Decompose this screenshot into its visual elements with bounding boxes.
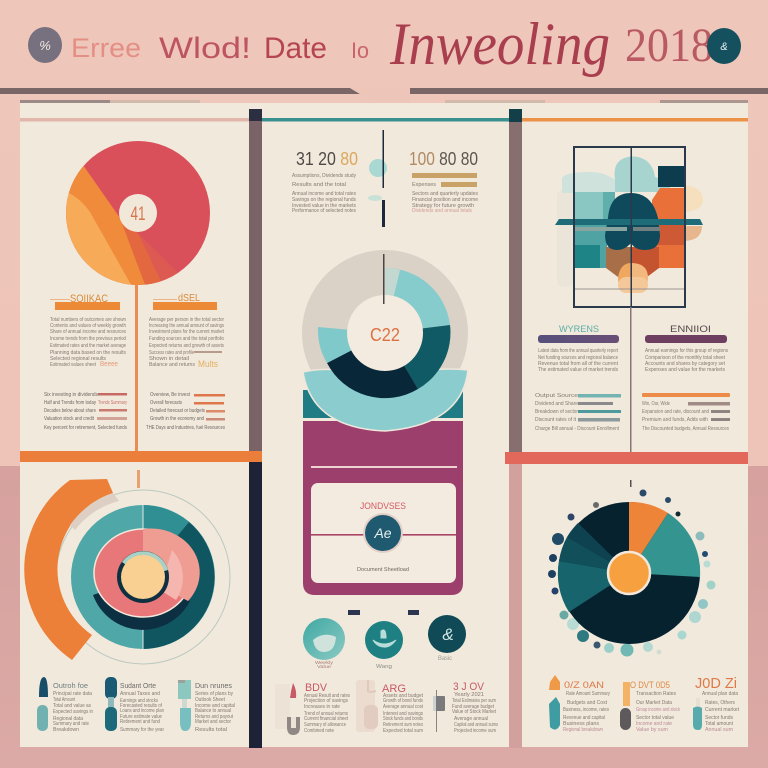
item two <box>105 677 164 733</box>
bars: left column B: Overview, Be invest <box>150 392 191 398</box>
text block: left column A: Beeee <box>100 361 118 368</box>
text block: right column B: Annual earnings for this group of regions <box>645 348 728 354</box>
text block: left column B: Shown in detail <box>149 356 189 362</box>
item one: Expected savings in <box>53 709 93 715</box>
stat numbers left: 31 20 80 <box>296 149 358 169</box>
item three: Annual sum <box>705 727 733 733</box>
item one: Summary and rate <box>53 721 89 727</box>
item one: Revenue and capital <box>563 715 605 721</box>
text block left: Invested value in the markets <box>292 203 356 209</box>
text block: left column A: Income trends from the previous period <box>50 336 126 342</box>
text block: left column B: Investment plans for the current market <box>149 329 225 335</box>
item three: Income and capital <box>195 703 235 709</box>
text block: middle bottom two: ARG <box>382 683 406 695</box>
text block: middle bottom one: Combined note <box>304 728 334 734</box>
orange band <box>20 451 262 462</box>
text block: middle bottom three: 3 J OV <box>453 681 485 693</box>
text block: left column B: Average per person in the total sector <box>149 317 224 323</box>
title: first words <box>71 32 369 65</box>
center decoration <box>368 130 387 227</box>
text block: left column A: Contents and values of weekly growth <box>50 323 126 329</box>
bars: left column A: Six investing in dividends <box>44 392 98 398</box>
bars: right column B: Premium and funds, Adds with <box>642 417 708 423</box>
text block: middle bottom one: Projection of savings <box>304 698 348 704</box>
column strip <box>20 118 748 122</box>
text block left: Results and the total <box>292 182 346 188</box>
icon: glyph circle: Basic <box>438 656 452 662</box>
item two: Income and rate <box>636 721 672 727</box>
icon: left badge <box>28 27 62 63</box>
panel: cream sheet <box>20 103 748 747</box>
item two: Group income and stock <box>636 707 680 713</box>
text block: left column A: Estimated values sheet <box>50 362 97 368</box>
icon: dish circle <box>365 621 403 670</box>
item three: Balance to annual <box>195 708 231 714</box>
bars: left column A: Valuation stock and credit <box>44 416 95 422</box>
text block right: Expenses <box>412 182 437 188</box>
icon: glyph circle <box>428 615 466 662</box>
text block: middle bottom two: Stock funds and bonds <box>383 716 423 722</box>
item two: Future estimate value <box>120 714 162 720</box>
stat numbers right: 100 80 80 <box>409 149 478 169</box>
title: first words: Date <box>264 32 327 65</box>
text block: right column A: Revenue total from all of the current <box>538 361 619 367</box>
item one: Principal rate data <box>53 691 92 697</box>
bars: right column B: The Discounted budgets, Annual Resources <box>642 426 729 432</box>
text block: right column B: Comparison of the monthly total sheet <box>645 355 726 361</box>
orange arc <box>24 479 113 660</box>
bars: right column A: Dividend and Share <box>535 401 578 407</box>
item one: Rate Amount Summary <box>566 691 610 697</box>
icon: bowl circle: Value <box>317 664 332 669</box>
bars: left column B: Growth in the economy and <box>150 416 204 422</box>
title: year: 2018 <box>625 19 713 72</box>
text block: left column A: Planning data based on the results <box>50 350 126 356</box>
item three <box>693 675 740 733</box>
text block: middle bottom three: Fund average budget <box>452 704 495 710</box>
bars: left column A: Half and Trends from today <box>44 400 96 406</box>
header rules <box>0 88 768 103</box>
item two: Sector total value <box>636 715 674 721</box>
item one: Business, income, rates <box>563 707 609 713</box>
item three: Series of plans by <box>195 691 233 697</box>
panel: purple card <box>303 421 463 595</box>
text block: middle bottom two: Expected total sum <box>383 728 423 734</box>
text block: middle bottom three: Value of Stock Market <box>452 709 497 715</box>
dots <box>548 490 716 656</box>
text block: middle bottom one: Annual Result and rates <box>304 693 350 699</box>
column dividers <box>249 109 522 748</box>
bars: right column A <box>535 393 621 432</box>
text block: middle bottom three: Projected income sum <box>454 728 496 734</box>
text block: left column A: SOIIKAC <box>70 293 108 305</box>
text block right: Dividends and annual totals <box>412 208 472 214</box>
icon: bowl circle: Weekly <box>315 660 334 665</box>
item two: Transaction Rates <box>636 691 676 697</box>
item two: O DVT 0D5 <box>630 680 670 690</box>
text block: middle bottom three: Yearly 2021 <box>454 692 484 698</box>
item two <box>620 680 680 733</box>
text block: right column B: ENNIIOI <box>670 324 711 334</box>
icon: left badge: % <box>39 38 51 53</box>
title: first words: Wlod! <box>159 32 251 65</box>
item two: Loans and income plan <box>120 708 164 714</box>
text block right: Strategy for future growth <box>412 203 474 209</box>
text block: left column A: Total numbers of outcomes are shown <box>50 317 126 323</box>
item two: Retirement and fund <box>120 719 160 725</box>
icon: card badge: Ae <box>373 525 392 541</box>
text block: middle bottom three: Capital and annual sums <box>454 722 498 728</box>
icon: dish circle: Wang <box>376 664 392 670</box>
item two: Our Market Data <box>636 700 672 706</box>
text block: right column A: The estimated value of market trends <box>538 367 618 373</box>
text block: middle bottom two: Assets and budget <box>383 693 424 699</box>
text block: right column A <box>538 324 619 373</box>
item one: Business plans <box>563 721 600 727</box>
text block: left column B: Mults <box>198 359 218 369</box>
text block: left column B: Increasing the annual amount of savings <box>149 323 224 329</box>
text block: left column A: Share of annual income and resources <box>50 329 126 335</box>
text block: right column B <box>645 324 728 373</box>
bars: right column A: Output Source <box>535 393 578 399</box>
title banner <box>28 11 741 77</box>
item three: Current market <box>705 707 740 713</box>
tick above pie <box>630 480 632 487</box>
chart: right pie <box>548 490 716 656</box>
item one: Outroh foe <box>53 683 88 690</box>
text block: middle bottom one: Summary of allowance <box>304 722 346 728</box>
text block: left column B: Funding sources and the total portfolio <box>149 336 224 342</box>
card heading: JONDVSES <box>360 501 406 511</box>
item one: Budgets and Cost <box>567 700 608 706</box>
bars: right column A: Charge Bill annual - Discount Enrollment <box>535 426 620 432</box>
chart: right abstract illustration <box>555 147 703 307</box>
card caption: Document Sheetload <box>357 567 409 573</box>
bars: left column A: Decades below about share <box>44 408 96 414</box>
connector line <box>135 284 138 452</box>
bars: right column B <box>642 393 730 432</box>
item one: Regional data <box>53 716 83 722</box>
bars: left column A <box>44 392 127 431</box>
item three: Outlook Sheet <box>195 697 226 703</box>
text block: middle bottom two: Growth of bond funds <box>383 698 423 704</box>
donut bowl and ring: C22 <box>370 325 400 345</box>
text block: left column A <box>50 293 126 368</box>
text block left: Savings on the regional funds <box>292 197 356 203</box>
bars: right column A: Breakdown of sector <box>535 409 578 415</box>
stats: middle top <box>292 130 478 227</box>
bars: left column A: Trends Summary <box>98 400 127 406</box>
text block: middle bottom three: Total Estimates per sum <box>452 698 496 704</box>
bars: left column B: Detailed forecast or budgets <box>150 408 205 414</box>
item one: 0/Z 0AN <box>564 680 604 690</box>
item three <box>178 680 235 733</box>
item three: J0D Zi <box>695 675 737 692</box>
icon: bowl circle <box>303 618 345 669</box>
text block: middle bottom one: Increases in rate <box>304 704 340 710</box>
text block: left column B <box>149 293 225 369</box>
bars: left column B: THE Days and Industries, fuel Resources <box>146 425 225 431</box>
text block: middle bottom two: Interest and savings <box>383 711 423 717</box>
item three: Dun nrunes <box>195 683 232 690</box>
item three: Rates, Others <box>705 700 735 706</box>
text block right: Sectors and quarterly updates <box>412 191 478 197</box>
text block: right column A: Net funding sources and regional balance <box>538 355 618 361</box>
icon: right badge <box>707 28 741 64</box>
item three: Market and sector <box>195 719 231 725</box>
item one: Total Amount <box>53 697 75 703</box>
legend: bottom right items <box>549 675 740 733</box>
item three: Results total <box>195 727 227 733</box>
item three: Total amount <box>705 721 734 727</box>
icon: right badge: & <box>720 41 728 53</box>
text block: middle bottom two: Average annual cost <box>383 704 424 710</box>
red band <box>505 452 748 464</box>
text block: middle bottom one <box>275 682 350 735</box>
text block right: Financial position and income <box>412 197 478 203</box>
bars: left column B: Overall forecasts <box>150 400 182 406</box>
legend: bottom left items <box>37 677 235 733</box>
item one: Breakdown <box>53 727 79 733</box>
icon row: three circles <box>303 615 466 670</box>
item three: Returns and payout <box>195 714 234 720</box>
text block left: Assumptions, Dividends study <box>292 173 356 179</box>
text block: middle bottom one: Trend of annual returns <box>304 711 348 717</box>
item one: Total and value as <box>53 703 91 709</box>
item three: Annual plan data <box>702 691 738 697</box>
item two: Sudant Orte <box>120 683 156 690</box>
bars: left column B <box>146 392 225 431</box>
text block: left column B: Balance and returns <box>149 362 195 368</box>
text block: middle bottom one: Current financial sheet <box>304 716 349 722</box>
item three: Sector funds <box>705 715 733 721</box>
chart: middle donut <box>302 250 468 418</box>
text block: left column B: Expected returns and growth of assets <box>149 343 224 349</box>
title: script word: Inweoling <box>389 11 610 77</box>
title: first words: Io <box>351 38 369 63</box>
icon: card badge <box>363 513 403 553</box>
item two: Earnings and stocks <box>120 698 158 704</box>
text block: left column A: Selected regional results <box>50 356 106 362</box>
text block: left column A: Estimated rates and the market average <box>50 343 126 349</box>
bars: right column B: Expansion and rate, discount and <box>642 409 709 415</box>
text block: left column B: dSEL <box>178 293 200 304</box>
text block: middle bottom one: BDV <box>305 682 328 694</box>
item two: Value by sum <box>636 727 668 733</box>
text block left <box>292 173 356 214</box>
item one <box>549 675 610 733</box>
text block: left column B: Success rates and profile <box>149 350 194 356</box>
item one <box>37 677 93 733</box>
connector line right <box>630 307 632 452</box>
text block: middle bottom three: Average annual <box>454 716 488 722</box>
markers <box>348 610 419 615</box>
text block left: Performance of selected notes <box>292 208 356 214</box>
icon: glyph circle: & <box>442 625 454 644</box>
chart: red and orange circle: 41 <box>130 204 146 225</box>
text block right <box>412 173 478 214</box>
text block: middle bottom three <box>433 681 498 734</box>
text block: right column A: WYRENS <box>559 324 599 334</box>
item two: Annual Taxes and <box>120 691 160 697</box>
chart: red and orange circle <box>66 141 210 285</box>
item two: Forecasted results of <box>120 703 163 709</box>
bars: right column A: Discount rates of it <box>535 417 577 423</box>
text block: right column B: Expenses and value for the markets <box>645 367 726 373</box>
text block: middle bottom two: Retirement sum notes <box>383 722 423 728</box>
bars: right column B: Win, Our, Wide <box>642 401 670 407</box>
text block: right column A: Latest data from the annual quarterly report <box>538 348 619 354</box>
text block left: Annual income and total rates <box>292 191 356 197</box>
bars: left column A: Key percent for retirement, Selected funds <box>44 425 127 431</box>
donut bowl and ring <box>303 254 468 431</box>
title: first words: Erree <box>71 33 141 63</box>
text block: middle bottom two <box>356 680 424 734</box>
item two: Summary for the year <box>120 727 164 733</box>
item one: Regional breakdown <box>563 727 603 733</box>
chart: concentric ring <box>24 470 230 664</box>
text block: right column B: Accounts and shares by category set <box>645 361 726 367</box>
